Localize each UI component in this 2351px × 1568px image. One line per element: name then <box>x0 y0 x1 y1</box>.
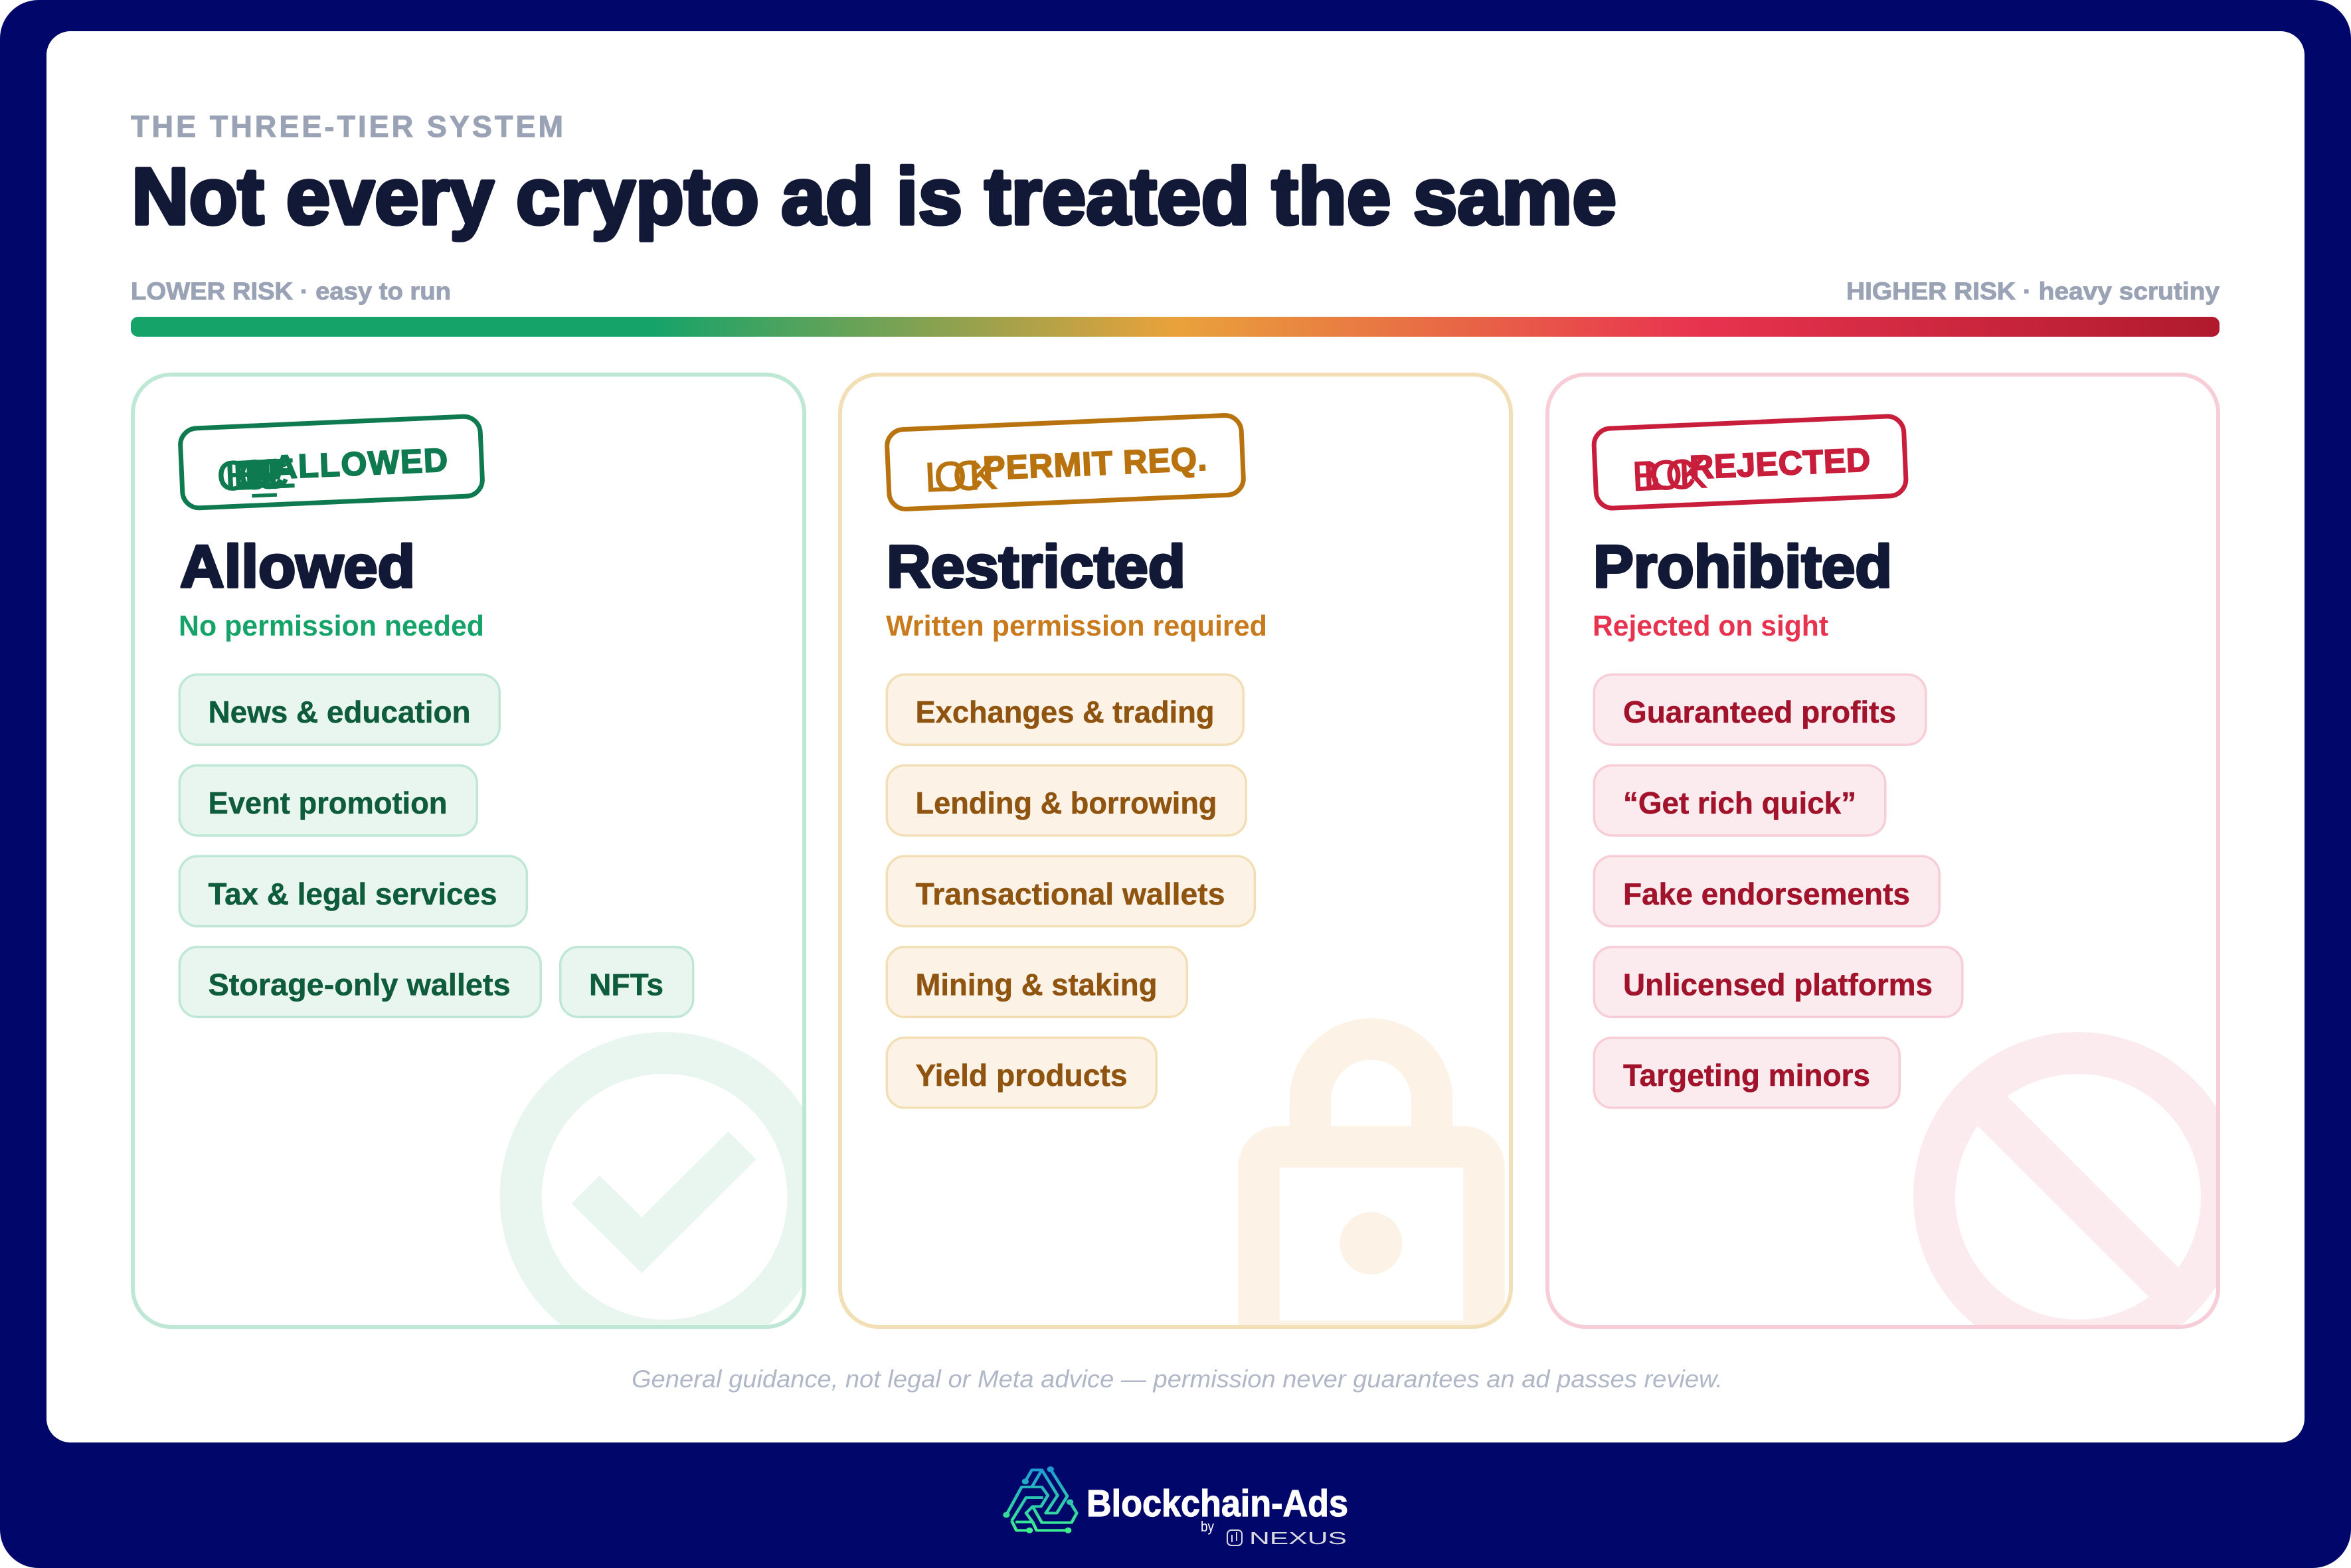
tag: event promotion: Event promotion <box>209 786 448 820</box>
tag: lending & borrowing: Lending & borrowing <box>915 786 1217 820</box>
subheading: No permission needed <box>179 610 484 642</box>
panel: allowed <box>133 375 808 1340</box>
icon: prohibited sign watermark <box>1934 1053 2222 1340</box>
risk scale <box>131 277 2220 337</box>
heading: Prohibited <box>1593 534 1892 600</box>
stamp: permit req <box>887 414 1244 510</box>
stamp: allowed <box>180 416 483 509</box>
tag: fake endorsements <box>1594 856 1939 926</box>
tag: exchanges & trading <box>887 675 1243 744</box>
tag: guaranteed profits <box>1594 675 1926 744</box>
tag: lending & borrowing <box>887 765 1246 835</box>
heading: Allowed <box>180 534 415 600</box>
tag: targeting minors: Targeting minors <box>1623 1058 1870 1092</box>
stamp: rejected: REJECTED <box>1689 441 1871 486</box>
panel outline <box>133 375 804 1327</box>
tag: get rich quick <box>1594 765 1885 835</box>
panel: restricted <box>840 375 1511 1342</box>
heading: Restricted <box>887 534 1185 600</box>
stamp: allowed: ALLOWED <box>272 441 448 486</box>
gradient risk bar <box>131 317 2220 337</box>
tag: storage-only wallets <box>179 947 541 1017</box>
subheading: Rejected on sight <box>1593 610 1828 642</box>
tag: tax & legal services: Tax & legal services <box>209 877 497 911</box>
stamp: allowed: CHECK_CIRCLE <box>216 450 296 499</box>
nexus wordmark: NEXUS <box>1249 1529 1347 1548</box>
tag: mining & staking: Mining & staking <box>915 967 1157 1002</box>
tag: transactional wallets: Transactional wallets <box>915 877 1225 911</box>
header eyebrow: THE THREE-TIER SYSTEM <box>131 110 563 143</box>
tag: targeting minors <box>1594 1038 1899 1108</box>
tag: news & education <box>179 675 499 744</box>
tag: yield products <box>887 1038 1156 1108</box>
panel outline <box>1547 375 2218 1327</box>
tag: NFTs <box>561 947 693 1017</box>
tag: event promotion <box>179 765 477 835</box>
subheading: Written permission required <box>886 610 1267 642</box>
tag: news & education: News & education <box>209 695 470 729</box>
lower risk label: LOWER RISK · easy to run <box>131 277 451 305</box>
by: by <box>1201 1518 1214 1535</box>
tag: unlicensed platforms <box>1594 947 1962 1017</box>
title: Not every crypto ad is treated the same <box>131 151 1616 241</box>
stamp: rejected <box>1593 416 1907 509</box>
brand logo <box>1003 1466 1348 1548</box>
footnote: General guidance, not legal or Meta advice — permission never guarantees an ad passes review. <box>632 1365 1723 1393</box>
icon: nexus mark <box>1227 1530 1242 1545</box>
stamp: permit req: LOCK <box>924 452 998 501</box>
tag: exchanges & trading: Exchanges & trading <box>915 695 1214 729</box>
tag: guaranteed profits: Guaranteed profits <box>1623 695 1896 729</box>
tag: NFTs: NFTs <box>589 967 663 1002</box>
tag: get rich quick: “Get rich quick” <box>1623 786 1856 820</box>
icon: blockchain-ads mark <box>1003 1466 1077 1533</box>
wordmark: Blockchain-Ads <box>1087 1482 1348 1525</box>
tag: tax & legal services <box>179 856 527 926</box>
panel outline <box>840 375 1511 1327</box>
tag: unlicensed platforms: Unlicensed platforms <box>1623 967 1933 1002</box>
icon: lock watermark <box>1259 1039 1484 1342</box>
tag: storage-only wallets: Storage-only wallets <box>209 967 510 1002</box>
tag: fake endorsements: Fake endorsements <box>1623 877 1910 911</box>
tag: transactional wallets <box>887 856 1255 926</box>
icon: check circle watermark <box>521 1053 808 1340</box>
stamp: rejected: BLOCK <box>1631 451 1707 500</box>
tag: yield products: Yield products <box>915 1058 1128 1092</box>
tag: mining & staking <box>887 947 1187 1017</box>
higher risk label: HIGHER RISK · heavy scrutiny <box>1846 277 2220 305</box>
stamp: permit req: PERMIT REQ. <box>982 440 1207 487</box>
panel: prohibited <box>1547 375 2222 1340</box>
